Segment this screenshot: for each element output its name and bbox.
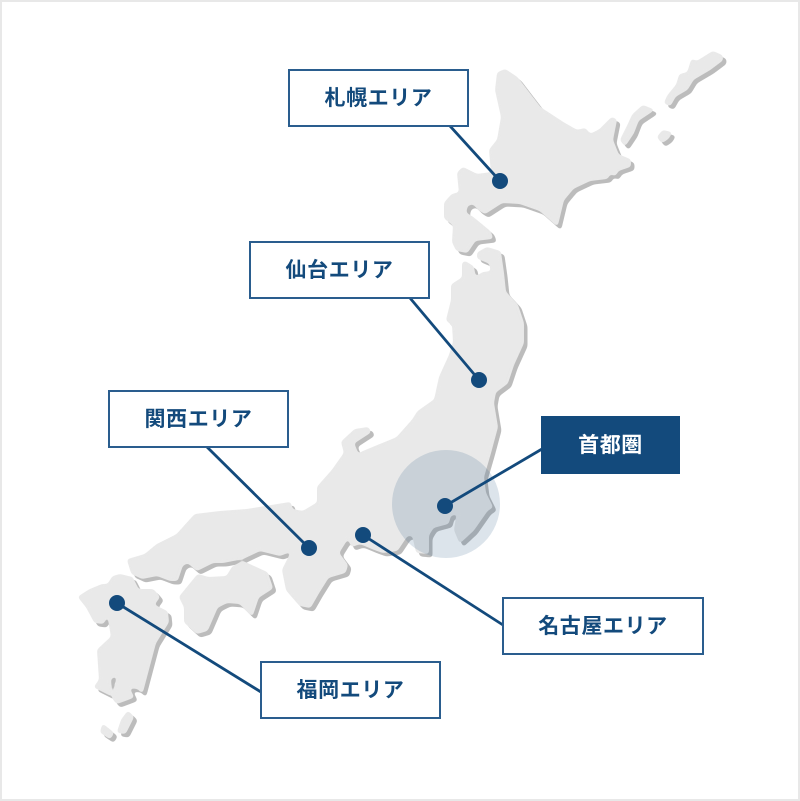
label: Sapporo: 札幌エリア	[324, 87, 432, 110]
land shadow	[82, 56, 726, 742]
connector: Fukuoka	[117, 603, 261, 692]
marker: Kanto	[437, 498, 453, 514]
marker: Nagoya	[355, 527, 371, 543]
label: Kanto capital region	[541, 416, 680, 474]
label: Fukuoka: 福岡エリア	[296, 679, 404, 702]
connector: Kanto	[445, 449, 542, 506]
connector: Sendai	[410, 298, 479, 380]
marker: Fukuoka	[109, 595, 125, 611]
label: Fukuoka	[260, 661, 441, 719]
label: Sendai: 仙台エリア	[286, 259, 394, 282]
connector: Kansai	[207, 447, 309, 548]
connector: Sapporo	[450, 126, 500, 181]
label: Kanto capital region: 首都圏	[578, 434, 643, 457]
marker: Sendai	[471, 372, 487, 388]
label: Kansai: 関西エリア	[144, 408, 252, 431]
marker: Sapporo	[492, 173, 508, 189]
connector: Nagoya	[363, 535, 503, 625]
label: Nagoya	[502, 597, 704, 655]
highlight circle: capital region	[392, 450, 500, 558]
land: Japan	[79, 52, 722, 738]
label: Nagoya: 名古屋エリア	[538, 615, 668, 638]
label: Sapporo	[288, 69, 469, 127]
label: Kansai	[108, 390, 289, 448]
marker: Kansai	[301, 540, 317, 556]
label: Sendai	[249, 241, 430, 299]
